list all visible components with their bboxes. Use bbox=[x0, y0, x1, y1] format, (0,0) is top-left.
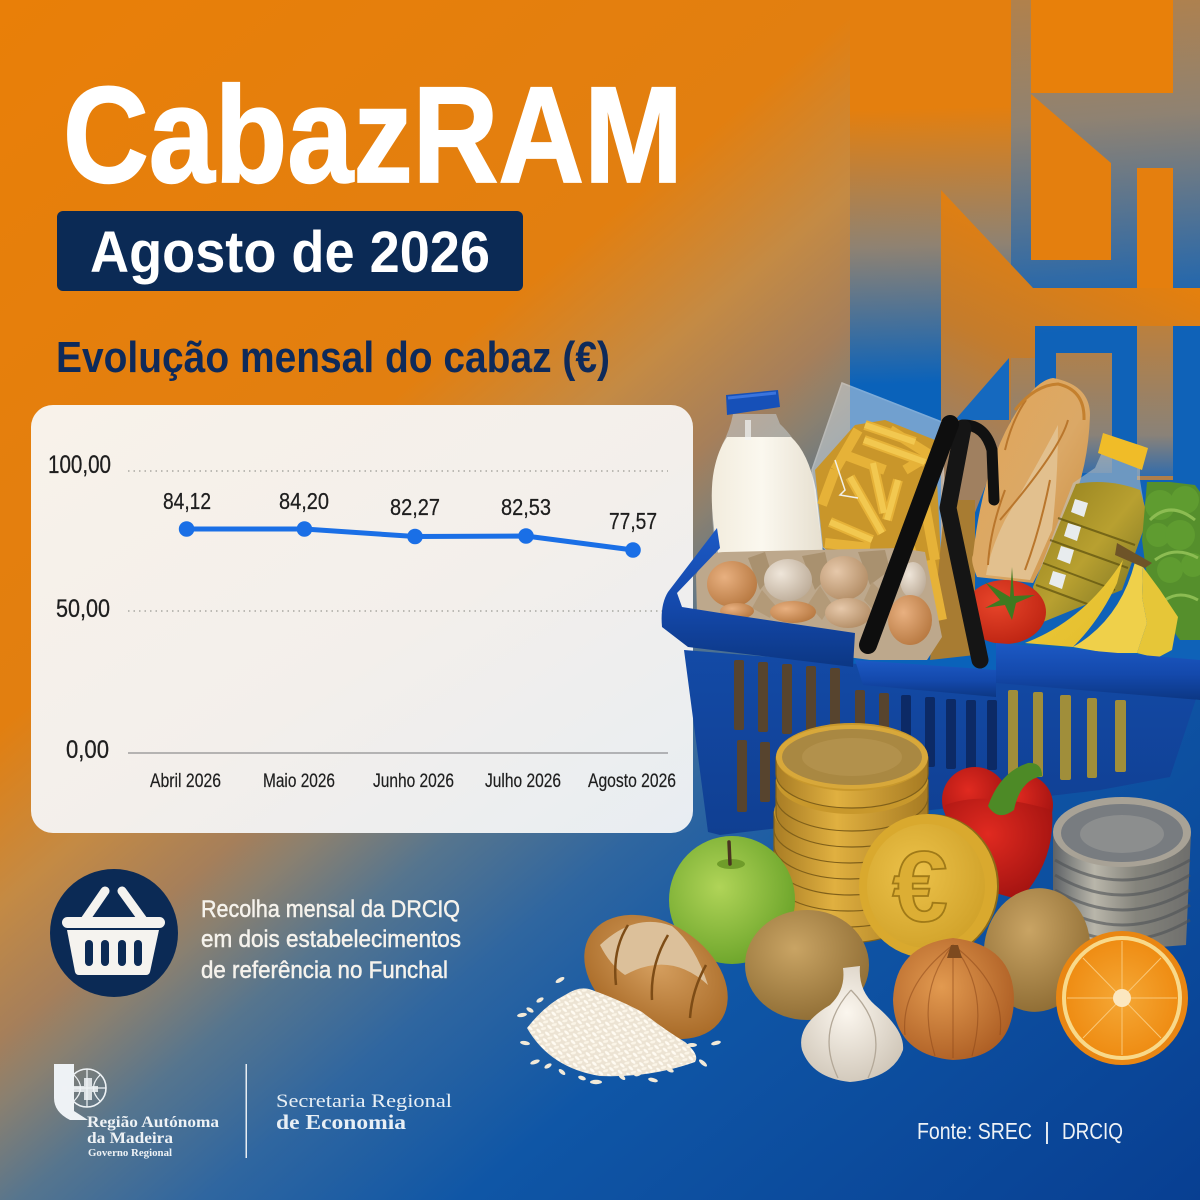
source: Fonte: SREC bbox=[917, 1118, 1032, 1144]
gold coin stack bbox=[768, 723, 928, 943]
pasta bag bbox=[812, 383, 975, 660]
collection note: em dois estabelecimentos bbox=[201, 926, 461, 953]
source: DRCIQ bbox=[1062, 1118, 1123, 1144]
tin can bbox=[1053, 797, 1191, 950]
orange half bbox=[1056, 931, 1188, 1065]
baguette bbox=[972, 378, 1090, 583]
data line bbox=[179, 521, 641, 558]
collection note: de referência no Funchal bbox=[201, 957, 448, 984]
logo: Região Autónoma da Madeira: da Madeira bbox=[87, 1130, 173, 1147]
basket handles bbox=[868, 424, 994, 660]
title: CabazRAM bbox=[63, 59, 683, 212]
potato right bbox=[976, 881, 1098, 1019]
month labels bbox=[150, 770, 676, 792]
y axis labels: 50,00 bbox=[56, 595, 110, 623]
euro coin: € bbox=[892, 831, 948, 943]
data values: 84,12 bbox=[163, 488, 211, 514]
chart heading: Evolução mensal do cabaz (€) bbox=[56, 333, 610, 382]
logo: Região Autónoma da Madeira bbox=[54, 1064, 219, 1159]
data values: 77,57 bbox=[609, 508, 657, 534]
month labels: Maio 2026 bbox=[263, 770, 335, 792]
month labels: Julho 2026 bbox=[485, 770, 561, 792]
department name: Secretaria Regional bbox=[276, 1091, 452, 1112]
month labels: Abril 2026 bbox=[150, 770, 221, 792]
eggs in carton bbox=[696, 548, 942, 660]
front rim bbox=[662, 528, 1200, 700]
collection note bbox=[201, 896, 461, 984]
oil bottle bbox=[1033, 433, 1148, 622]
basket bbox=[662, 528, 1200, 835]
red pepper bbox=[942, 763, 1053, 900]
tomato bbox=[964, 567, 1046, 644]
milk bottle bbox=[712, 390, 823, 553]
y axis labels bbox=[48, 451, 111, 764]
month labels: Junho 2026 bbox=[373, 770, 454, 792]
data values bbox=[163, 488, 657, 534]
collection note: Recolha mensal da DRCIQ bbox=[201, 896, 460, 923]
department name: de Economia bbox=[276, 1110, 407, 1134]
garlic bbox=[801, 966, 903, 1082]
source bbox=[917, 1118, 1123, 1144]
bananas bbox=[1025, 543, 1178, 658]
lettuce bbox=[1142, 482, 1200, 640]
department name bbox=[276, 1091, 452, 1134]
logo: Região Autónoma da Madeira: Governo Regional bbox=[88, 1147, 172, 1159]
source: | bbox=[1044, 1118, 1050, 1144]
data values: 82,53 bbox=[501, 494, 551, 520]
green apple bbox=[669, 836, 795, 964]
y axis labels: 100,00 bbox=[48, 451, 111, 479]
date banner: Agosto de 2026 bbox=[90, 220, 490, 285]
month labels: Agosto 2026 bbox=[588, 770, 676, 792]
icon: shopping basket bbox=[50, 869, 178, 997]
y axis labels: 0,00 bbox=[66, 736, 109, 764]
onion bbox=[893, 938, 1014, 1060]
rice pile bbox=[517, 976, 721, 1084]
round bread bbox=[561, 889, 751, 1065]
logo: Região Autónoma da Madeira: Região Autónoma bbox=[87, 1114, 219, 1131]
data values: 82,27 bbox=[390, 494, 440, 520]
geometric background pattern bbox=[850, 0, 1200, 700]
data values: 84,20 bbox=[279, 488, 329, 514]
panel: line chart bbox=[31, 405, 693, 833]
potato bbox=[745, 910, 869, 1020]
euro coin bbox=[859, 814, 999, 958]
